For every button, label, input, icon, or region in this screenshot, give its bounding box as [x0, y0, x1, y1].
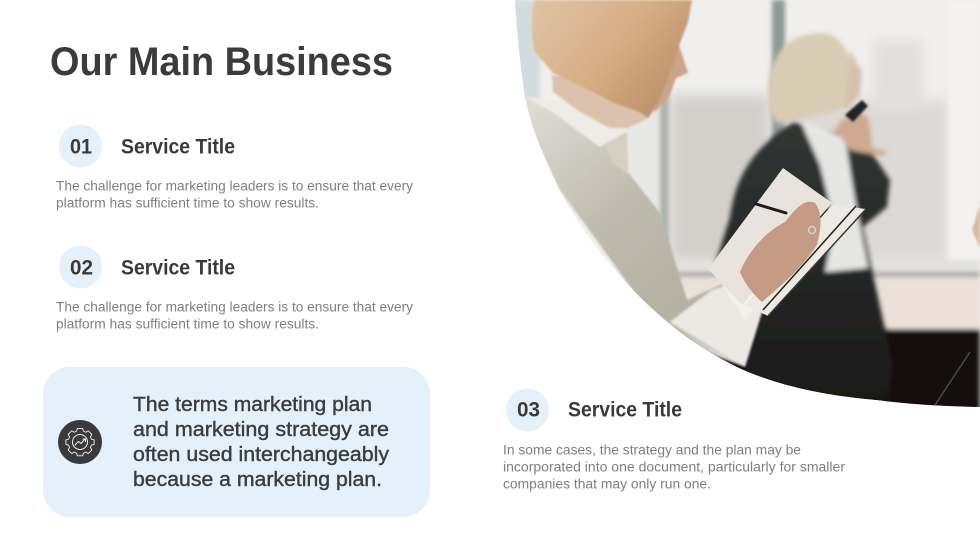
service 03 description: In some cases, the strategy and the plan may be — [503, 442, 801, 458]
callout panel — [43, 367, 430, 517]
notebook — [708, 168, 866, 316]
person edge at right — [972, 205, 980, 248]
callout text: The terms marketing plan — [133, 393, 372, 416]
service 03 description: incorporated into one document, particularly for smaller — [503, 460, 846, 474]
service 01 — [56, 124, 413, 210]
foreground woman hair — [532, 0, 692, 118]
number badge 03: 03 — [517, 398, 540, 422]
service 03 description: companies that may only run one. — [503, 476, 711, 492]
service 01 description — [56, 178, 413, 210]
service 02 description: platform has sufficient time to show results. — [56, 316, 319, 332]
number badge 02 — [59, 246, 102, 288]
service 03 title: Service Title — [568, 398, 682, 422]
service 03 — [503, 388, 846, 492]
callout text — [133, 393, 390, 491]
callout text: often used interchangeably — [133, 443, 390, 466]
foreground woman neck and face — [552, 75, 660, 128]
service 02 description: The challenge for marketing leaders is to ensure that every — [56, 300, 413, 314]
number badge 02: 02 — [70, 256, 93, 280]
number badge 03 — [506, 388, 549, 432]
foreground woman shirt — [515, 95, 762, 367]
icon: gear with chart — [58, 420, 102, 464]
service 01 description: The challenge for marketing leaders is to ensure that every — [56, 178, 413, 194]
number badge 01 — [59, 124, 102, 168]
hand with pen — [740, 202, 821, 302]
service 02 title: Service Title — [121, 256, 235, 280]
callout text: and marketing strategy are — [133, 418, 389, 441]
window background — [510, 0, 980, 419]
service 02 description — [56, 300, 413, 332]
background woman — [715, 33, 893, 420]
photo: two businesswomen by a window — [510, 0, 980, 420]
title: Our Main Business — [50, 40, 393, 84]
number badge 01: 01 — [70, 136, 92, 158]
service 01 title: Service Title — [121, 136, 235, 158]
service 02 — [56, 246, 413, 332]
service 01 description: platform has sufficient time to show results. — [56, 196, 319, 210]
service 03 description — [503, 442, 846, 492]
callout text: because a marketing plan. — [133, 468, 382, 491]
